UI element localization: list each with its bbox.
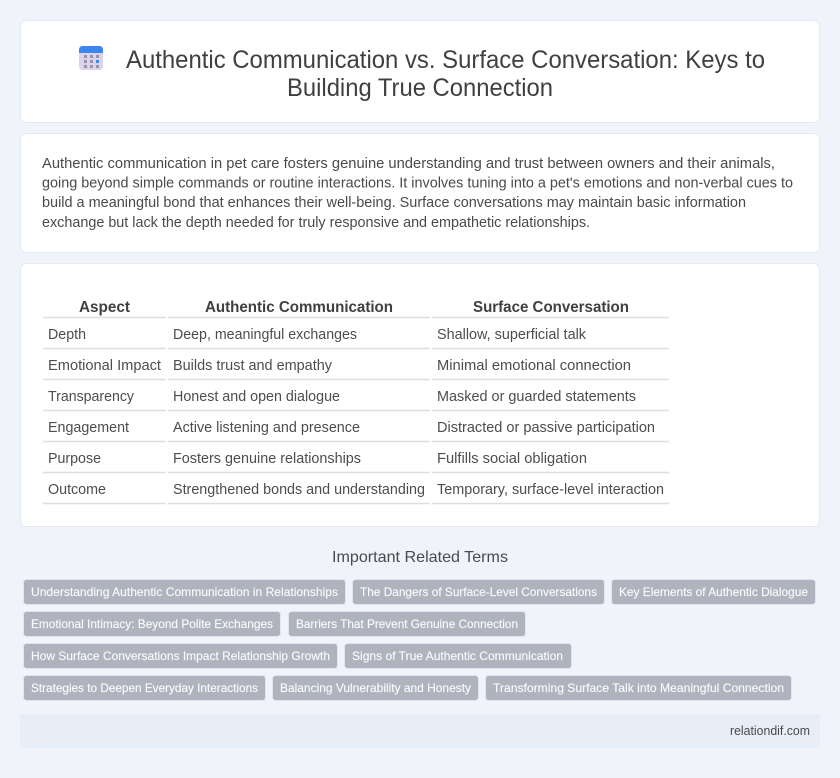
tag: Strategies to Deepen Everyday Interactions: [31, 681, 258, 695]
row: purpose: Fulfills social obligation: [437, 451, 587, 467]
tag: Understanding Authentic Communication in Relationships: [31, 585, 338, 599]
intro text block: exchange but lack the depth needed for truly responsive and empathetic relationships.: [42, 215, 590, 231]
title: Authentic Communication vs. Surface Conversation: Keys to: [126, 46, 765, 74]
tag: Signs of True Authentic Communication: [352, 649, 563, 663]
footer: [20, 714, 820, 748]
row: depth: [48, 327, 587, 343]
tag: [612, 580, 816, 604]
table header: Aspect: [79, 299, 131, 316]
tag: Transforming Surface Talk into Meaningful Connection: [493, 681, 784, 695]
row: depth: Depth: [48, 327, 86, 343]
related term tags: [24, 580, 816, 700]
footer: relationdif.com: [730, 724, 810, 738]
row: transparency: Transparency: [48, 389, 135, 405]
row: outcome: Outcome: [48, 482, 106, 498]
tag: [24, 676, 266, 700]
tag: [288, 612, 526, 636]
title: Building True Connection: [287, 74, 553, 102]
row: purpose: Purpose: [48, 451, 101, 467]
tag: Key Elements of Authentic Dialogue: [619, 585, 808, 599]
row: transparency: [48, 389, 636, 405]
row: engagement: Distracted or passive participation: [437, 420, 655, 436]
panel: title header: [20, 20, 820, 122]
row: depth: Shallow, superficial talk: [437, 327, 587, 343]
row: transparency: Honest and open dialogue: [173, 389, 340, 405]
row: purpose: [48, 451, 587, 467]
row: outcome: [48, 482, 664, 498]
panel: introduction: [20, 134, 820, 252]
tag: Emotional Intimacy: Beyond Polite Exchanges: [31, 617, 273, 631]
intro text block: [42, 156, 793, 231]
tag: The Dangers of Surface-Level Conversations: [360, 585, 597, 599]
panel: comparison table: [20, 264, 820, 526]
row: purpose: Fosters genuine relationships: [173, 451, 361, 467]
tag: [344, 644, 572, 668]
tag: [24, 644, 338, 668]
row: emotional impact: Emotional Impact: [48, 358, 161, 374]
tag: [352, 580, 604, 604]
icon: calendar: [79, 46, 103, 70]
title: [126, 46, 765, 102]
heading: important related terms: Important Related Terms: [332, 549, 508, 566]
tag: [24, 612, 280, 636]
table header: Surface Conversation: [473, 299, 629, 316]
tag: How Surface Conversations Impact Relationship Growth: [31, 649, 330, 663]
row: outcome: Temporary, surface-level interaction: [437, 482, 664, 498]
table header: [79, 299, 629, 316]
row: emotional impact: Builds trust and empathy: [173, 358, 333, 374]
row: engagement: Active listening and presence: [173, 420, 360, 436]
tag: [272, 676, 478, 700]
row: outcome: Strengthened bonds and understanding: [173, 482, 425, 498]
tag: [486, 676, 792, 700]
row: emotional impact: [48, 358, 631, 374]
row: engagement: Engagement: [48, 420, 129, 436]
tag: Barriers That Prevent Genuine Connection: [296, 617, 518, 631]
intro text block: going beyond simple commands or routine interactions. It involves tuning into a pet's emotions and non-verbal cues to: [42, 176, 793, 192]
intro text block: build a meaningful bond that enhances their well-being. Surface conversations may maintain basic information: [42, 195, 746, 211]
intro text block: Authentic communication in pet care fosters genuine understanding and trust between owners and their animals,: [42, 156, 775, 172]
row: engagement: [48, 420, 655, 436]
tag: [24, 580, 346, 604]
row: transparency: Masked or guarded statements: [437, 389, 636, 405]
tag: Balancing Vulnerability and Honesty: [280, 681, 471, 695]
table header: Authentic Communication: [205, 299, 393, 316]
row: depth: Deep, meaningful exchanges: [173, 327, 357, 343]
row: emotional impact: Minimal emotional connection: [437, 358, 631, 374]
